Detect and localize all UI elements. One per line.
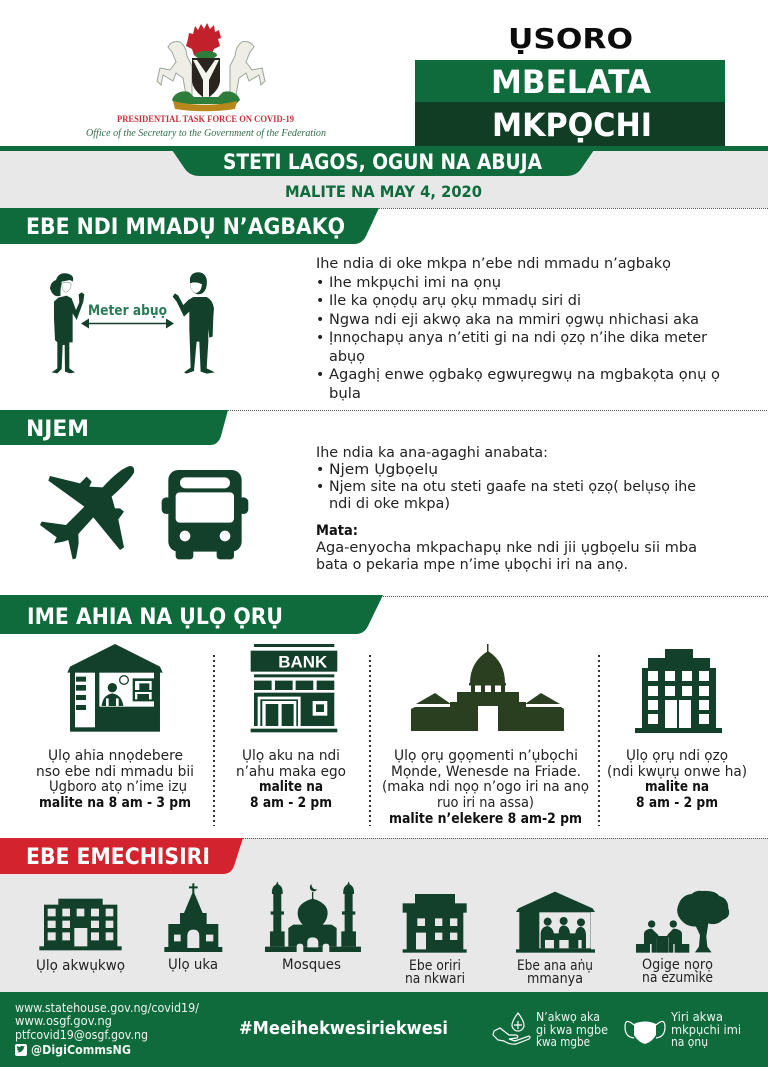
- icon: bar with people: [516, 892, 595, 953]
- icon: government building: [411, 644, 564, 731]
- tip: wash hands: [493, 1010, 608, 1049]
- icon: church: [164, 883, 222, 952]
- column: banks: 8 am - 2 pm: [250, 795, 332, 811]
- list: required items: •: [316, 312, 324, 328]
- list: restricted travel: •: [316, 462, 324, 478]
- note: mata: [316, 523, 697, 573]
- contact details: @DigiCommsNG: [31, 1043, 131, 1057]
- list: restricted travel: Njem Ụgbọelụ: [329, 462, 438, 478]
- column: neighbourhood markets: nso ebe ndi mmadu bii: [36, 764, 194, 780]
- column: government offices: Ụlọ ọrụ gọọmenti n’ụbọchi: [394, 748, 578, 764]
- list: required items: Ile ka ọnọdụ arụ ọkụ mmadụ siri di: [329, 293, 581, 309]
- icon: woman: [50, 273, 84, 373]
- icon: tree with seated people: [636, 891, 729, 953]
- column: banks: [236, 644, 346, 811]
- item: bars: mmanya: [527, 971, 583, 987]
- list: restricted travel: [316, 445, 696, 512]
- contact details: www.statehouse.gov.ng/covid19/: [15, 1001, 200, 1015]
- title block: [415, 22, 725, 146]
- column: other offices: malite na: [645, 779, 709, 795]
- item: parks: Ogige nọrọ: [642, 957, 713, 973]
- heading bar: [0, 208, 379, 244]
- item: church: [164, 883, 222, 973]
- column: banks: n’ahu maka ego: [236, 764, 346, 780]
- panel: public gatherings: [0, 208, 768, 402]
- icon: hand and water drop: [493, 1013, 530, 1044]
- title word: ỤSORO: [508, 22, 633, 55]
- list: required items: Ngwa ndi eji akwọ aka na mmiri ọgwụ nhichasi aka: [329, 312, 699, 328]
- column: other offices: [607, 649, 747, 811]
- heading bar: [0, 838, 243, 874]
- hashtag: #Meeihekwesiriekwesi: [239, 1018, 448, 1039]
- heading bar: [0, 595, 383, 634]
- start date: MALITE NA MAY 4, 2020: [285, 182, 482, 201]
- column: other offices: (ndi kwụrụ onwe ha): [607, 764, 747, 780]
- item: restaurants: Ebe oriri: [409, 958, 461, 974]
- item: parks: na ezumike: [642, 970, 713, 986]
- icon: twitter: [15, 1044, 27, 1056]
- column: government offices: malite n’elekere 8 am-2 pm: [389, 811, 582, 827]
- icon: man: [173, 272, 215, 374]
- arrow: two meter spacing: [81, 318, 174, 328]
- icon: bus: [162, 470, 248, 559]
- title box: mbelata: [415, 60, 725, 102]
- footer: [0, 992, 768, 1067]
- icon: airplane: [40, 466, 134, 559]
- title box: mbelata: MBELATA: [491, 63, 651, 101]
- list: required items: •: [316, 275, 324, 291]
- item: parks: [636, 891, 729, 986]
- tip: wash hands: kwa mgbe: [536, 1035, 590, 1049]
- title box: mkpochi: [415, 102, 725, 146]
- ribbon: states: STETI LAGOS, OGUN NA ABUJA: [223, 150, 543, 174]
- item: mosque: [265, 881, 361, 973]
- subtitle band: [0, 146, 768, 208]
- icon: coat of arms: [157, 23, 265, 111]
- list: required items: abụọ: [329, 349, 365, 365]
- office line: Office of the Secretary to the Government of the Federation: [86, 127, 326, 139]
- list: required items: Agaghị enwe ọgbakọ egwụregwụ na mgbakọta ọnụ ọ: [329, 367, 720, 383]
- icon: bank: [251, 644, 337, 732]
- note: mata: bata o pekaria mpe n’ime ụbọchi iri na anọ.: [316, 557, 628, 573]
- list: restricted travel: ndi di oke mkpa): [329, 496, 450, 512]
- panel: closed places: [0, 838, 768, 993]
- heading bar: IME AHIA NA ỤLỌ ỌRỤ: [27, 605, 283, 630]
- panel: markets and offices: [0, 595, 768, 827]
- item: school: Ụlọ akwụkwọ: [36, 958, 125, 974]
- column: neighbourhood markets: [36, 644, 194, 811]
- list: required items: Ihe mkpụchi imi na ọnụ: [329, 275, 501, 291]
- heading bar: NJEM: [26, 417, 89, 442]
- heading bar: EBE EMECHISIRI: [26, 845, 210, 870]
- contact details: ptfcovid19@osgf.gov.ng: [15, 1028, 148, 1042]
- item: school: [36, 899, 125, 974]
- tip: wear mask: na ọnụ: [671, 1035, 708, 1049]
- item: mosque: Mosques: [282, 957, 341, 973]
- list: required items: [316, 256, 720, 402]
- column: other offices: 8 am - 2 pm: [636, 795, 718, 811]
- icon: school: [39, 899, 122, 950]
- heading bar: EBE NDI MMADỤ N’AGBAKỌ: [26, 215, 345, 240]
- column: government offices: ruo iri na assa): [437, 795, 534, 811]
- tip: wear mask: Yiri akwa: [670, 1010, 723, 1024]
- column: neighbourhood markets: Ụlọ ahia nnọdebere: [48, 748, 183, 764]
- item: restaurants: na nkwari: [405, 971, 465, 987]
- list: required items: bụla: [329, 386, 361, 402]
- tip: wash hands: N’akwọ aka: [536, 1010, 600, 1024]
- distance label: Meter abụọ: [88, 303, 167, 319]
- list: required items: •: [316, 367, 324, 383]
- column: other offices: Ụlọ ọrụ ndi ọzọ: [626, 748, 728, 764]
- item: church: Ụlọ uka: [168, 957, 218, 973]
- tip: wash hands: gi kwa mgbe: [536, 1023, 608, 1037]
- contact details: www.osgf.gov.ng: [15, 1014, 112, 1028]
- title box: mkpochi: MKPỌCHI: [492, 106, 652, 144]
- icon: bank: BANK: [278, 652, 327, 671]
- column: government offices: Mọnde, Wenesde na Friade.: [391, 764, 581, 780]
- note: mata: Mata:: [316, 523, 358, 539]
- icon: mosque: [265, 881, 361, 952]
- task force title: PRESIDENTIAL TASK FORCE ON COVID-19: [117, 114, 294, 124]
- list: required items: Ihe ndia di oke mkpa n’ebe ndi mmadu n’agbakọ: [316, 256, 671, 272]
- icon: market stall: [67, 644, 163, 732]
- icon: hotel: [403, 894, 467, 953]
- icon: face mask: [625, 1021, 665, 1044]
- contact details: [15, 1001, 200, 1057]
- list: restricted travel: •: [316, 479, 324, 495]
- illustration: two people two meters apart: [50, 272, 215, 374]
- icon: office tower: [635, 649, 722, 733]
- panel: travel: [0, 410, 768, 573]
- item: bars: Ebe ana aṅụ: [517, 958, 593, 974]
- tip: wear mask: mkpụchi imi: [671, 1023, 741, 1037]
- list: restricted travel: Njem site na otu steti gaafe na steti ọzọ( belụsọ ihe: [329, 479, 696, 495]
- column: government offices: (maka ndi nọọ n’ogo iri na anọ: [382, 779, 589, 795]
- tip: wear mask: [625, 1010, 741, 1049]
- item: restaurants: [403, 894, 467, 987]
- note: mata: Aga-enyocha mkpachapụ nke ndi jii ụgbọelu sii mba: [316, 540, 697, 556]
- list: required items: •: [316, 293, 324, 309]
- column: banks: Ụlọ aku na ndi: [242, 748, 340, 764]
- column: neighbourhood markets: Ụgboro atọ n’ime izụ: [49, 779, 187, 795]
- column: government offices: [382, 644, 589, 827]
- column: neighbourhood markets: malite na 8 am - 3 pm: [39, 795, 191, 811]
- column: banks: malite na: [259, 779, 323, 795]
- list: restricted travel: Ihe ndia ka ana-agaghi anabata:: [316, 445, 548, 461]
- heading bar: [0, 410, 228, 445]
- list: required items: •: [316, 330, 324, 346]
- header: coat of arms and task force credit: [86, 23, 326, 139]
- list: required items: Ịnnọchapụ anya n’etiti gi na ndi ọzọ n’ihe dika meter: [329, 330, 707, 346]
- item: bars: [516, 892, 595, 987]
